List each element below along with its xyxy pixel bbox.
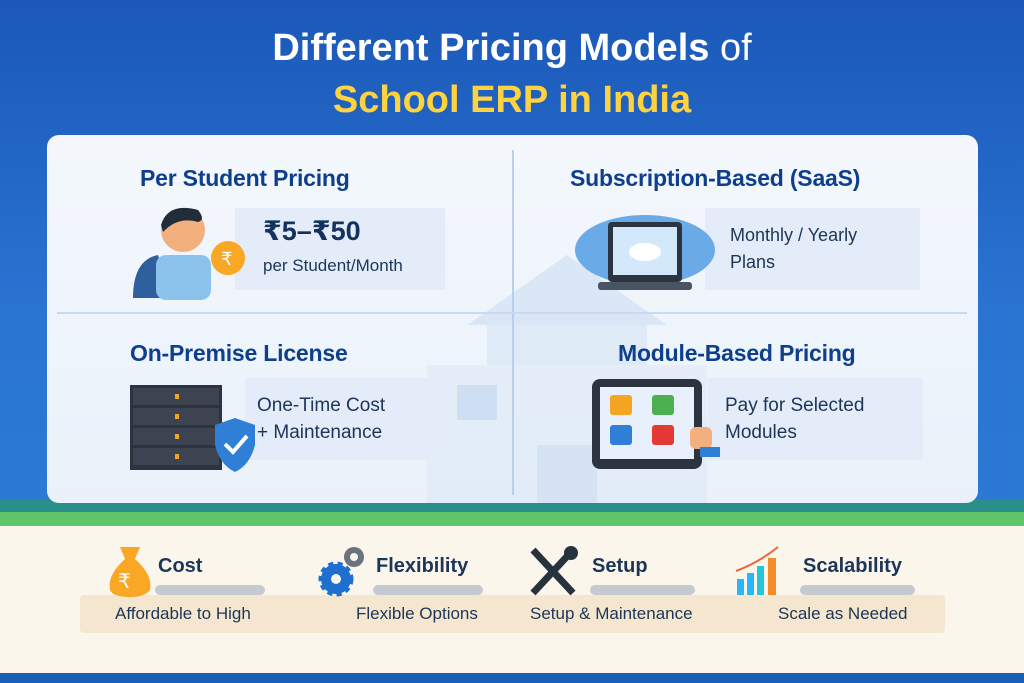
item: cost: [110, 547, 265, 623]
price text: per Student/Month: [263, 256, 403, 275]
item: setup: [530, 546, 695, 623]
icon: cloud laptop: [575, 215, 715, 290]
item: setup: Setup: [592, 555, 648, 577]
text: Monthly / Yearly: [730, 225, 857, 245]
bottom strip: [80, 595, 945, 633]
icon: student with coin: [133, 208, 245, 300]
item: flexibility: Flexible Options: [356, 604, 478, 623]
icon: server shield: [130, 385, 255, 472]
icon: tools: [530, 546, 578, 596]
title: [272, 27, 752, 121]
price text: ₹5–₹50: [263, 216, 361, 246]
school building: [427, 255, 707, 503]
text: One-Time Cost: [257, 395, 385, 416]
text: Modules: [725, 422, 797, 443]
text: + Maintenance: [257, 422, 382, 443]
item: flexibility: Flexibility: [376, 555, 468, 577]
heading: On-Premise License: [130, 340, 348, 366]
icon: money bag: [110, 547, 150, 597]
heading: Subscription-Based (SaaS): [570, 165, 860, 191]
background sky: [0, 0, 1024, 525]
icon: gears: [318, 547, 364, 596]
item: cost: Affordable to High: [115, 604, 251, 623]
icon: tablet modules: [592, 379, 720, 469]
title: Different Pricing Models of: [272, 27, 752, 69]
title: School ERP in India: [333, 79, 691, 121]
heading: Per Student Pricing: [140, 165, 350, 191]
text: [708, 378, 923, 460]
item: setup: Setup & Maintenance: [530, 604, 693, 623]
price text: [235, 208, 445, 290]
panel: per student: [133, 165, 445, 300]
text: [705, 208, 920, 290]
panel: on-premise: [130, 340, 427, 472]
panel: saas: [570, 165, 920, 290]
icon: growth chart: [736, 546, 779, 595]
item: scalability: [736, 546, 915, 623]
icon: money bag: ₹: [118, 571, 131, 593]
text: Pay for Selected: [725, 395, 864, 416]
icon: student with coin: ₹: [221, 249, 232, 269]
item: scalability: Scale as Needed: [778, 604, 907, 623]
panel: module-based: [592, 340, 923, 469]
text: [245, 378, 450, 460]
heading: Module-Based Pricing: [618, 340, 856, 366]
item: scalability: Scalability: [803, 555, 902, 577]
text: Plans: [730, 252, 775, 272]
main card: [47, 135, 978, 503]
item: cost: Cost: [158, 555, 202, 577]
item: flexibility: [318, 547, 483, 623]
